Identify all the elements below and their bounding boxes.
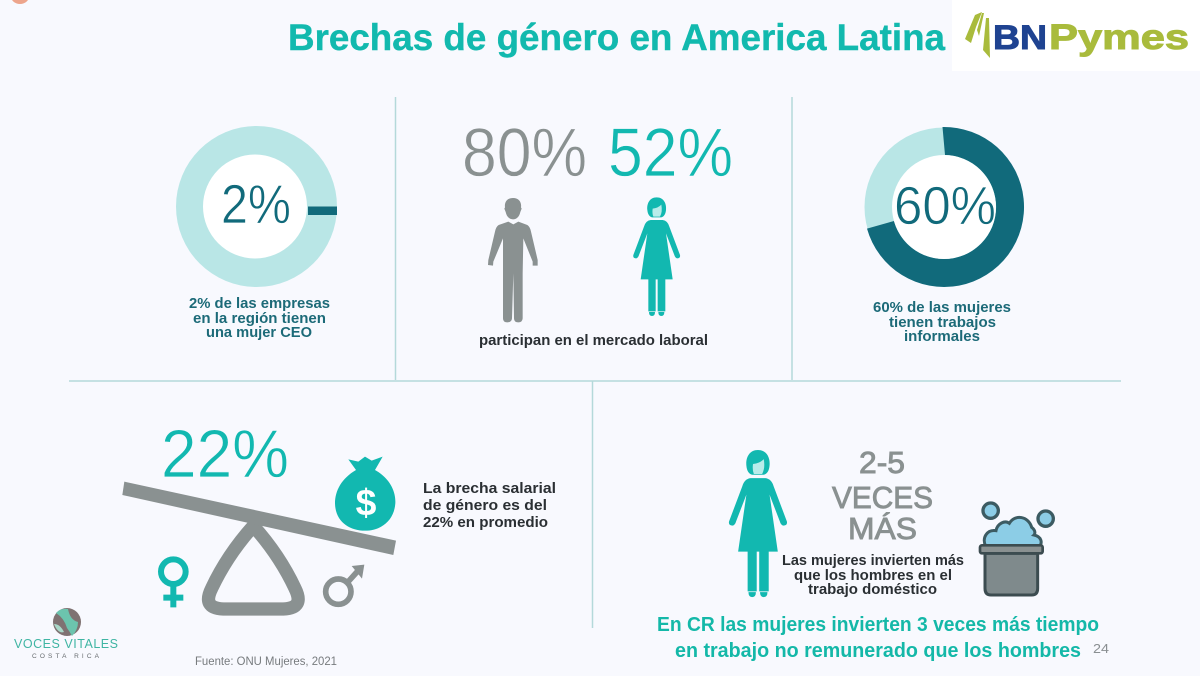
logo wordmark: VOCES VITALES — [14, 637, 118, 651]
text trabajo doméstico: que los hombres en el — [794, 568, 952, 584]
panel: trabajos informales — [864, 127, 1024, 345]
text brecha salarial — [423, 481, 556, 531]
logo wordmark Pymes: Pymes — [1049, 18, 1189, 57]
text trabajo doméstico: trabajo doméstico — [808, 582, 937, 598]
panel: mercado laboral — [462, 114, 733, 349]
caption mercado laboral: participan en el mercado laboral — [479, 333, 708, 349]
caption CEO: en la región tienen — [193, 311, 326, 327]
donut chart 2% — [176, 126, 337, 287]
title: Brechas de género en America Latina — [288, 17, 945, 58]
caption informales: informales — [904, 329, 980, 345]
value 22%: 22% — [161, 416, 289, 492]
caption CEO: una mujer CEO — [206, 325, 312, 341]
text brecha salarial: 22% en promedio — [423, 515, 548, 531]
donut value 2%: 2% — [221, 173, 291, 235]
value 52%: 52% — [608, 114, 733, 191]
text brecha salarial: de género es del — [423, 498, 547, 514]
panel: brecha salarial — [122, 416, 556, 609]
text brecha salarial: La brecha salarial — [423, 481, 556, 497]
text trabajo doméstico: Las mujeres invierten más — [782, 553, 964, 569]
caption informales: tienen trabajos — [889, 315, 996, 331]
heading 2-5 veces más: 2-5 — [859, 445, 905, 480]
heading 2-5 veces más — [832, 445, 933, 546]
icon: leaf emblem — [53, 608, 81, 636]
caption CEO: 2% de las empresas — [189, 296, 330, 312]
value 80%: 80% — [462, 114, 587, 191]
text trabajo doméstico — [782, 553, 964, 598]
icon: money bag: $ — [356, 481, 377, 523]
panel: mujeres CEO — [176, 126, 337, 341]
caption informales: 60% de las mujeres — [873, 300, 1011, 316]
caption CEO — [189, 296, 330, 341]
conclusion Costa Rica — [657, 614, 1099, 662]
caption informales — [873, 300, 1011, 345]
donut value 60%: 60% — [894, 176, 996, 236]
conclusion Costa Rica: En CR las mujeres invierten 3 veces más tiempo — [657, 614, 1099, 636]
icon: logo sails — [965, 12, 990, 58]
icon: woman large — [729, 450, 787, 597]
logo: BN Pymes — [952, 0, 1200, 71]
icon: seesaw — [122, 482, 396, 609]
donut chart 60% — [864, 127, 1024, 287]
icon: woman — [633, 197, 680, 316]
source note: Fuente: ONU Mujeres, 2021 — [195, 656, 337, 668]
panel: trabajo doméstico — [657, 445, 1099, 662]
page number: 24 — [1093, 641, 1109, 656]
conclusion Costa Rica: en trabajo no remunerado que los hombres — [675, 640, 1081, 662]
icon: male symbol — [326, 565, 364, 604]
heading 2-5 veces más: MÁS — [848, 511, 917, 546]
icon: wash tub — [980, 503, 1053, 595]
icon: man — [488, 198, 538, 322]
heading 2-5 veces más: VECES — [832, 480, 933, 515]
logo: Voces Vitales — [14, 608, 118, 660]
logo wordmark BN: BN — [993, 19, 1047, 57]
logo subtitle: COSTA RICA — [32, 653, 100, 660]
icon: money bag — [335, 457, 395, 531]
icon: female symbol — [161, 559, 186, 607]
